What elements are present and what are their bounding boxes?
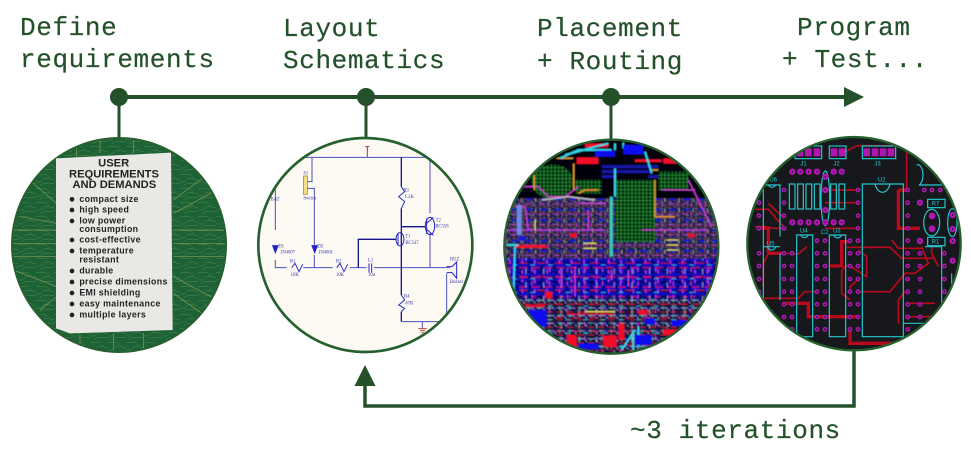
magenta pads (797, 148, 894, 156)
paper list (70, 194, 168, 320)
component labels: D2 (317, 244, 324, 249)
component labels: BUZ (450, 258, 459, 263)
heading: Program + Test: Program (797, 13, 911, 43)
paper list: precise dimensions (79, 277, 168, 287)
paper title: AND DEMANDS (72, 179, 156, 191)
cyan routes (507, 143, 652, 350)
component labels: 10K (291, 273, 299, 278)
component labels: 10u (368, 273, 376, 278)
component labels: R3 (403, 189, 409, 194)
component labels: 1.2K (405, 195, 414, 200)
component labels: R4 (404, 295, 410, 300)
paper list: compact size (79, 194, 139, 204)
paper list: EMI shielding (79, 288, 141, 298)
component labels: U3 (833, 229, 841, 235)
red traces (755, 146, 942, 343)
component labels: R1 (290, 260, 296, 265)
paper list: easy maintenance (79, 299, 161, 309)
component labels: U6 (769, 178, 778, 184)
component labels: Switch (303, 196, 317, 201)
resistors (292, 187, 405, 312)
paper list: temperature (79, 246, 134, 256)
component labels: T2 (436, 219, 442, 224)
component labels: 1N4007 (280, 250, 296, 255)
component labels: 10K (336, 273, 345, 278)
dark blue top region (602, 167, 658, 177)
heading: Placement + Routing: + Routing (537, 47, 683, 77)
paper title (69, 158, 159, 191)
timeline node: step 3 (602, 88, 620, 141)
paper list: durable (79, 265, 114, 275)
paper list: multiple layers (79, 310, 146, 320)
component labels: D1 (278, 244, 285, 249)
heading: Placement + Routing (537, 14, 683, 77)
heading: Program + Test (782, 13, 928, 75)
component labels: S1 (303, 171, 309, 176)
paper list: resistant (79, 255, 119, 265)
component labels: BC558 (435, 225, 449, 230)
component labels (271, 171, 464, 306)
component labels: BAT (271, 198, 280, 203)
paper list: consumption (79, 224, 138, 234)
component labels: R7 (932, 201, 940, 207)
red pads and routes (515, 143, 694, 348)
component labels (767, 161, 940, 247)
panel: placement and routing (503, 138, 720, 355)
magenta routes (505, 180, 712, 297)
transistors and diodes (273, 217, 457, 278)
orange routes (534, 158, 675, 217)
heading: Define requirements: Define (20, 13, 117, 43)
panel: schematic (258, 138, 473, 353)
schematic wires (275, 150, 450, 329)
component labels: U2 (878, 178, 886, 184)
timeline node: step 1 (110, 88, 128, 139)
paper list: low power (79, 216, 126, 226)
component labels: J2 (833, 161, 840, 167)
heading: Layout Schematics: Layout (283, 14, 380, 44)
component labels: U5 (767, 241, 775, 247)
blue planes (528, 145, 688, 349)
paper title: REQUIREMENTS (69, 168, 159, 180)
label: iterations: ~3 iterations (630, 416, 841, 446)
cyan outlines (763, 146, 957, 337)
component labels: L1 (368, 259, 374, 264)
heading: Layout Schematics: Schematics (283, 46, 445, 76)
component labels: C2 (821, 230, 829, 236)
green routing blocks (532, 164, 573, 199)
panel: requirements photo (11, 137, 227, 353)
component labels: R1 (932, 239, 940, 245)
iteration feedback arrow (354, 351, 854, 406)
component labels: R2 (336, 260, 342, 265)
heading: Layout Schematics (283, 14, 445, 76)
heading: Placement + Routing: Placement (537, 14, 683, 44)
timeline node: step 2 (357, 88, 375, 139)
component labels: J1 (800, 161, 807, 167)
paper list: high speed (79, 205, 129, 215)
heading: Program + Test: + Test... (782, 45, 928, 75)
component labels: 1N4001 (318, 251, 334, 256)
component labels: BC547 (405, 241, 419, 246)
paper list: cost-effective (79, 235, 141, 245)
yellow highlights (535, 220, 678, 312)
component labels: Buzzer (450, 280, 464, 285)
switch (303, 176, 307, 194)
heading: Define requirements: requirements (20, 45, 215, 75)
requirements paper (56, 153, 173, 333)
component labels: T1 (405, 234, 411, 239)
heading: Define requirements (20, 13, 215, 75)
panel: finished PCB layout (746, 136, 962, 352)
component labels: 47K (405, 301, 414, 306)
component labels: U4 (800, 229, 808, 235)
component labels: J3 (874, 161, 881, 167)
paper title: USER (98, 158, 129, 170)
timeline arrow (119, 87, 864, 107)
ground symbol (418, 329, 427, 333)
